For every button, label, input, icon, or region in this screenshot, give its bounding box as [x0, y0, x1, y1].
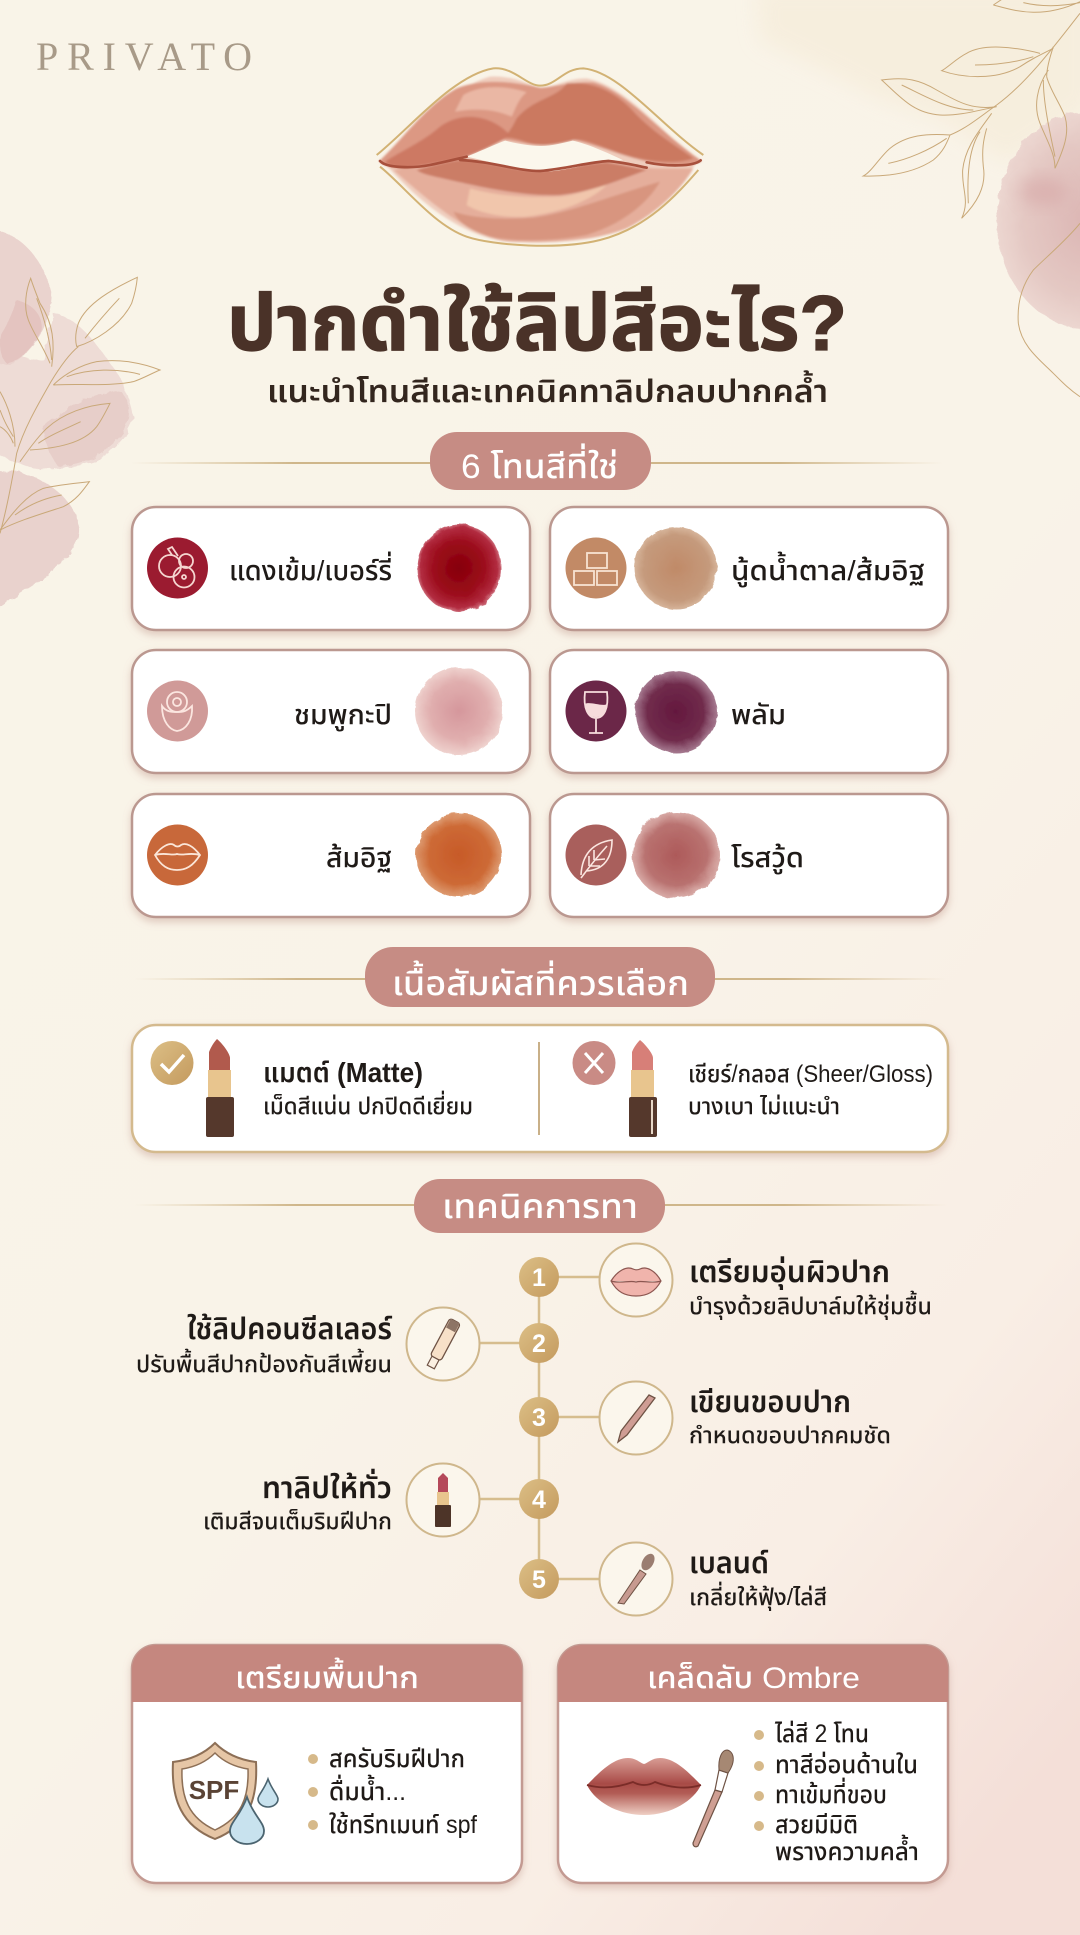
step 3: กำหนดขอบปากคมชัด — [689, 1422, 891, 1448]
icon: SPF shield: SPF — [189, 1775, 239, 1805]
panel: brick orange — [132, 794, 530, 917]
icon: lips — [611, 1268, 661, 1296]
timeline — [136, 1244, 932, 1616]
panel: ombre tips — [558, 1645, 948, 1883]
icon: wine glass — [566, 680, 626, 742]
bullet list: lip prep — [308, 1745, 477, 1839]
icon: lipstick — [435, 1473, 451, 1527]
step 4: ทาลิปให้ทั่ว — [262, 1468, 392, 1505]
icon: check — [150, 1041, 194, 1085]
upper lip shading — [503, 83, 693, 162]
lower lip highlight — [467, 185, 607, 217]
bullet list: ombre: ทาเข้มที่ขอบ — [775, 1777, 887, 1809]
step 4: เติมสีจนเต็มริมฝีปาก — [203, 1508, 392, 1534]
step 1: บำรุงด้วยลิปบาล์มให้ชุ่มชื้น — [689, 1290, 932, 1320]
panel: deep red / berry: แดงเข้ม/เบอร์รี่ — [229, 551, 392, 586]
section heading: 6 tones — [131, 432, 943, 490]
step 5 — [519, 1542, 827, 1616]
bullet list: ombre: สวยมีมิติ — [775, 1811, 858, 1839]
panel: mauve pink — [132, 650, 530, 773]
section heading: 6 tones: 6 โทนสีที่ใช่ — [461, 443, 618, 486]
bullet list: ombre: พรางความคล้ำ — [775, 1834, 919, 1866]
icon: leaf — [566, 824, 626, 886]
illustration: watercolor lips — [377, 68, 703, 246]
panel: brick orange: ส้มอิฐ — [326, 842, 392, 873]
text: sheer: เชียร์/กลอส (Sheer/Gloss) — [688, 1061, 933, 1088]
gold outline — [377, 68, 703, 246]
step 5: 5 — [532, 1566, 546, 1594]
mouth line — [380, 157, 701, 171]
title: ปากดำใช้ลิปสีอะไร? — [227, 279, 847, 367]
bullet list: ombre — [754, 1720, 919, 1866]
step 4 — [203, 1464, 559, 1536]
panel: plum — [550, 650, 948, 773]
icon: lip pencil — [618, 1395, 655, 1442]
step 2: ปรับพื้นสีปากป้องกันสีเพี้ยน — [136, 1348, 392, 1377]
panel: rosewood: โรสวู้ด — [731, 842, 804, 875]
panel: ombre tips: เคล็ดลับ Ombre — [647, 1662, 860, 1695]
panel: deep red / berry — [132, 507, 530, 630]
icon: rose — [147, 680, 208, 742]
icon: brush — [693, 1750, 733, 1847]
icon: lips — [147, 824, 208, 886]
icon: matte lipstick — [206, 1039, 234, 1137]
pale under-wash — [383, 76, 697, 242]
illustration: ombre lips — [587, 1758, 701, 1815]
swatch: plum — [635, 671, 717, 753]
icon: cross — [572, 1041, 616, 1085]
step 3: 3 — [532, 1404, 546, 1432]
step 3 — [519, 1382, 891, 1454]
bullet list: ombre: ทาสีอ่อนด้านใน — [775, 1751, 918, 1779]
lower lip bottom tone — [453, 182, 660, 240]
panel: mauve pink: ชมพูกะปิ — [294, 699, 392, 732]
section heading: textures: เนื้อสัมผัสที่ควรเลือก — [392, 960, 689, 1003]
panel: texture comparison — [132, 1025, 948, 1152]
decoration: left wash and leaves — [0, 230, 160, 610]
step 2: ใช้ลิปคอนซีลเลอร์ — [187, 1313, 393, 1346]
step 1 — [519, 1244, 932, 1320]
panel: nude brown: นู้ดน้ำตาล/ส้มอิฐ — [731, 551, 925, 588]
text: matte — [263, 1057, 473, 1119]
upper lip highlight — [455, 87, 527, 117]
logo: PRIVATO — [36, 34, 252, 79]
step 5: เบลนด์ — [689, 1547, 769, 1580]
lower lip inner band — [417, 160, 647, 195]
panel: plum: พลัม — [731, 699, 786, 730]
swatch: rosewood — [632, 812, 720, 898]
panel: lip prep — [132, 1645, 522, 1883]
subtitle: แนะนำโทนสีและเทคนิคทาลิปกลบปากคล้ำ — [267, 370, 828, 409]
step 5: เกลี่ยให้ฟุ้ง/ไล่สี — [689, 1581, 827, 1611]
text: sheer — [688, 1061, 933, 1119]
icon: berries — [147, 538, 208, 598]
step 3: เขียนขอบปาก — [689, 1386, 851, 1419]
step 4: 4 — [532, 1486, 546, 1514]
step 1: เตรียมอุ่นผิวปาก — [689, 1256, 890, 1290]
bullet list: lip prep: ดื่มน้ำ... — [329, 1774, 406, 1806]
bullet list: ombre: ไล่สี 2 โทน — [774, 1720, 869, 1748]
step 2: 2 — [532, 1330, 546, 1358]
icon: sheer lipstick — [629, 1040, 657, 1137]
decoration: top right wash and leaves — [757, 0, 1080, 397]
panel: rosewood — [550, 794, 948, 917]
upper lip left shading — [385, 117, 510, 168]
panel: nude brown — [550, 507, 948, 630]
step 1: 1 — [532, 1264, 546, 1292]
icon: SPF shield — [173, 1743, 278, 1844]
swatch: pink — [415, 667, 503, 755]
mouth opening — [467, 141, 623, 172]
icon: concealer — [425, 1318, 461, 1370]
section heading: technique: เทคนิคการทา — [442, 1188, 638, 1226]
text: sheer: บางเบา ไม่แนะนำ — [688, 1093, 840, 1119]
swatch: nude — [635, 527, 717, 609]
section heading: technique — [134, 1179, 947, 1233]
bullet list: lip prep: ใช้ทรีทเมนท์ spf — [329, 1811, 477, 1839]
step 2 — [136, 1308, 559, 1380]
swatch: orange — [416, 813, 502, 897]
text: matte: แมตต์ (Matte) — [263, 1057, 423, 1088]
bullet list: lip prep: สครับริมฝีปาก — [329, 1745, 465, 1773]
panel: lip prep: เตรียมพื้นปาก — [235, 1657, 419, 1695]
upper lip — [379, 82, 702, 169]
swatch: berry — [417, 524, 501, 612]
icon: bricks — [566, 538, 626, 598]
lower lip — [393, 159, 693, 242]
icon: brush — [618, 1551, 657, 1604]
text: matte: เม็ดสีแน่น ปกปิดดีเยี่ยม — [263, 1090, 473, 1119]
section heading: textures — [134, 947, 947, 1007]
